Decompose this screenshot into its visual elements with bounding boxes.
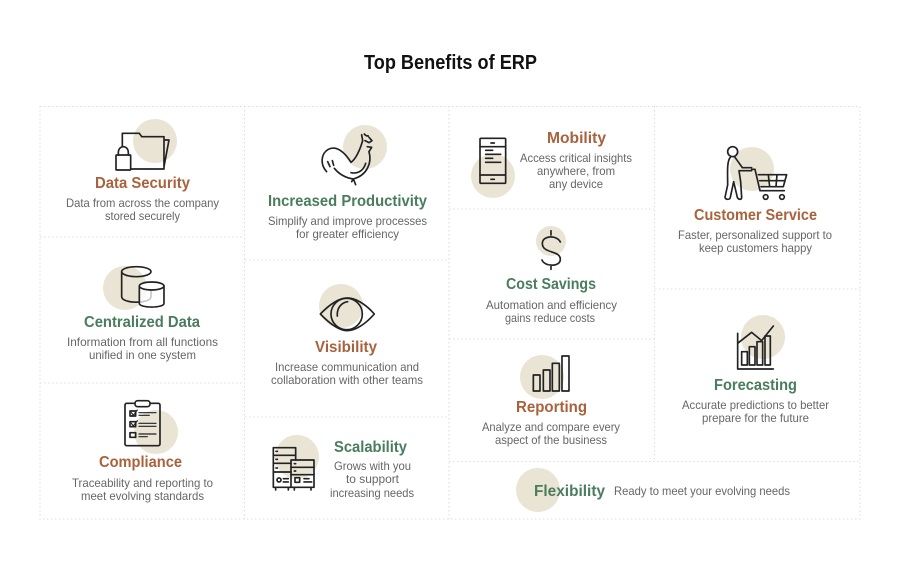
description: cost savings bbox=[486, 298, 617, 325]
description: reporting bbox=[482, 420, 620, 447]
panel: visibility bbox=[271, 284, 423, 387]
icon: server racks bbox=[273, 448, 314, 490]
description: visibility: collaboration with other teams bbox=[271, 373, 423, 387]
description: centralized data bbox=[67, 335, 218, 362]
description: reporting: Analyze and compare every bbox=[482, 420, 620, 434]
panel: forecasting bbox=[682, 315, 829, 425]
description: increased productivity bbox=[268, 214, 427, 241]
icon: eye bbox=[320, 298, 374, 331]
heading: data security: Data Security bbox=[95, 175, 190, 192]
description: forecasting: prepare for the future bbox=[702, 411, 809, 425]
description: scalability: increasing needs bbox=[330, 486, 414, 500]
description: compliance: meet evolving standards bbox=[81, 489, 204, 503]
heading: compliance: Compliance bbox=[99, 454, 182, 471]
description: compliance: Traceability and reporting to bbox=[72, 476, 213, 490]
icon: rooster bbox=[322, 134, 372, 185]
description: data security: stored securely bbox=[105, 209, 180, 223]
heading: cost savings: Cost Savings bbox=[506, 276, 596, 293]
panel: increased productivity bbox=[268, 125, 427, 241]
description: visibility bbox=[271, 360, 423, 387]
description: mobility: anywhere, from bbox=[537, 164, 615, 178]
icon: clipboard checklist bbox=[125, 401, 160, 446]
panel: data security bbox=[66, 119, 219, 223]
panel: compliance bbox=[72, 401, 213, 503]
description: reporting: aspect of the business bbox=[495, 433, 607, 447]
panel: customer service bbox=[678, 147, 832, 255]
description: scalability bbox=[330, 459, 414, 500]
icon: database cylinders bbox=[122, 267, 164, 307]
heading: scalability: Scalability bbox=[334, 439, 407, 456]
icon: mobile device bbox=[480, 138, 506, 183]
description: customer service bbox=[678, 228, 832, 255]
description: data security: Data from across the company bbox=[66, 196, 219, 210]
description: visibility: Increase communication and bbox=[275, 360, 419, 374]
description: cost savings: gains reduce costs bbox=[505, 311, 595, 325]
icon: folder and padlock bbox=[116, 133, 169, 170]
panel: mobility bbox=[471, 130, 632, 198]
description: mobility bbox=[520, 151, 632, 191]
panel: centralized data bbox=[67, 266, 218, 362]
description: forecasting: Accurate predictions to better bbox=[682, 398, 829, 412]
heading: reporting: Reporting bbox=[516, 399, 587, 416]
title: Top Benefits of ERP bbox=[364, 52, 537, 74]
heading: mobility: Mobility bbox=[547, 130, 606, 147]
description: increased productivity: Simplify and improve processes bbox=[268, 214, 427, 228]
heading: forecasting: Forecasting bbox=[714, 377, 797, 394]
description: scalability: Grows with you bbox=[334, 459, 411, 473]
icon: shopper with cart bbox=[725, 147, 787, 199]
description: flexibility: Ready to meet your evolving needs bbox=[614, 484, 790, 498]
heading: increased productivity: Increased Productivity bbox=[268, 193, 427, 210]
icon: dollar sign bbox=[542, 231, 560, 269]
description: increased productivity: for greater efficiency bbox=[296, 227, 399, 241]
description: compliance bbox=[72, 476, 213, 503]
description: mobility: any device bbox=[549, 177, 603, 191]
description: forecasting bbox=[682, 398, 829, 425]
panel: scalability bbox=[273, 435, 414, 500]
heading: centralized data: Centralized Data bbox=[84, 314, 200, 331]
heading: visibility: Visibility bbox=[315, 339, 377, 356]
description: cost savings: Automation and efficiency bbox=[486, 298, 617, 312]
icon: growth chart bbox=[738, 326, 773, 369]
panel: cost savings bbox=[486, 226, 617, 325]
description: mobility: Access critical insights bbox=[520, 151, 632, 165]
panel: reporting bbox=[482, 355, 620, 447]
description: customer service: keep customers happy bbox=[699, 241, 812, 255]
heading: customer service: Customer Service bbox=[694, 207, 817, 224]
description: centralized data: Information from all functions bbox=[67, 335, 218, 349]
panel: flexibility bbox=[516, 468, 790, 512]
description: customer service: Faster, personalized support to bbox=[678, 228, 832, 242]
description: scalability: to support bbox=[346, 472, 400, 486]
description: centralized data: unified in one system bbox=[89, 348, 196, 362]
description: data security bbox=[66, 196, 219, 223]
heading: flexibility: Flexibility bbox=[534, 483, 605, 500]
icon: bar chart bbox=[533, 356, 569, 391]
